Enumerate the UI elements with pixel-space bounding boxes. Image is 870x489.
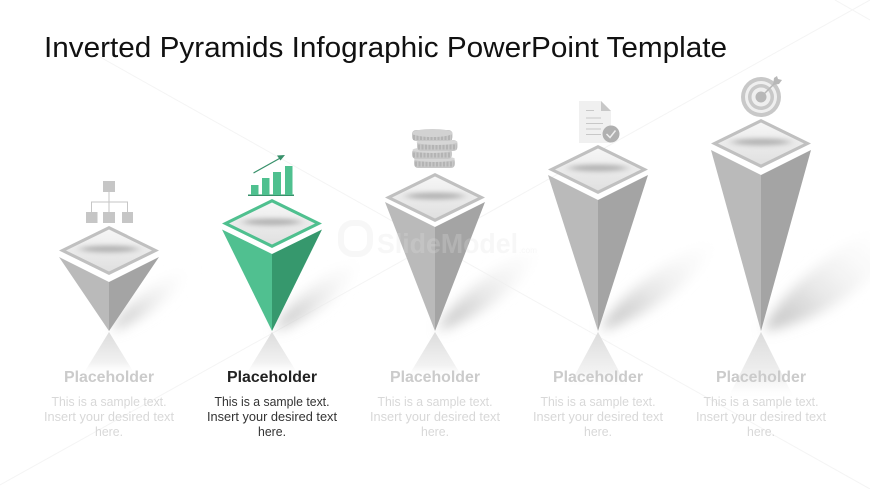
pyramid 2 body	[222, 230, 322, 331]
label 5	[696, 369, 826, 439]
label 2	[207, 369, 337, 439]
icon: growth chart	[248, 155, 294, 196]
column 3: coins	[370, 129, 548, 439]
pyramid 1 top	[59, 226, 159, 275]
column 4: document	[533, 101, 725, 439]
reflection 2	[245, 332, 299, 376]
title: Inverted Pyramids Infographic PowerPoint Template	[44, 32, 727, 64]
cast shadow 2	[275, 252, 368, 331]
pyramid 3 body	[385, 202, 485, 331]
icon: target	[741, 76, 782, 117]
label 3: here.	[421, 424, 449, 439]
label 1: here.	[95, 424, 123, 439]
pyramid 4 top	[548, 145, 648, 194]
icon: org chart	[86, 181, 133, 223]
watermark: SlideModel	[377, 228, 518, 259]
label 4	[533, 369, 663, 439]
label 3: This is a sample text.	[378, 394, 492, 409]
label 1: Placeholder	[64, 369, 154, 386]
label 3: Insert your desired text	[370, 409, 500, 424]
label 3: Placeholder	[390, 369, 480, 386]
reflection 3	[406, 332, 464, 380]
icon: document with check	[579, 101, 620, 143]
cast shadow 3	[438, 238, 548, 331]
pyramid 2 top	[222, 199, 322, 248]
reflection 4	[568, 332, 628, 388]
cast shadow 5	[764, 220, 870, 331]
cast shadow 4	[601, 232, 725, 331]
reflection 1	[82, 332, 136, 376]
pyramid 5 top	[711, 119, 811, 168]
column 5: target	[696, 76, 870, 439]
label 2: here.	[258, 424, 286, 439]
label 1	[44, 369, 174, 439]
pyramid 3 top	[385, 173, 485, 222]
label 4: Placeholder	[553, 369, 643, 386]
label 1: This is a sample text.	[52, 394, 166, 409]
label 4: This is a sample text.	[540, 394, 656, 409]
label 5: Insert your desired text	[696, 409, 826, 424]
column 1: organization	[44, 181, 195, 439]
pyramid 4 body	[548, 175, 648, 331]
watermark	[341, 223, 537, 259]
label 5: here.	[747, 424, 775, 439]
icon: coins	[412, 129, 458, 168]
label 5: Placeholder	[716, 369, 806, 386]
pyramid 1 body	[59, 257, 159, 331]
label 2: Insert your desired text	[207, 409, 337, 424]
label 5: This is a sample text.	[704, 394, 818, 409]
label 1: Insert your desired text	[44, 409, 174, 424]
label 3	[370, 369, 500, 439]
pyramid 5 body	[711, 150, 811, 331]
label 2: Placeholder	[227, 369, 317, 386]
label 4: Insert your desired text	[533, 409, 663, 424]
watermark: .com	[519, 246, 537, 255]
reflection 5	[727, 332, 795, 400]
column 2: growth (highlighted)	[207, 155, 368, 439]
label 2: This is a sample text.	[214, 394, 330, 409]
label 4: here.	[584, 424, 612, 439]
cast shadow 1	[112, 262, 195, 331]
